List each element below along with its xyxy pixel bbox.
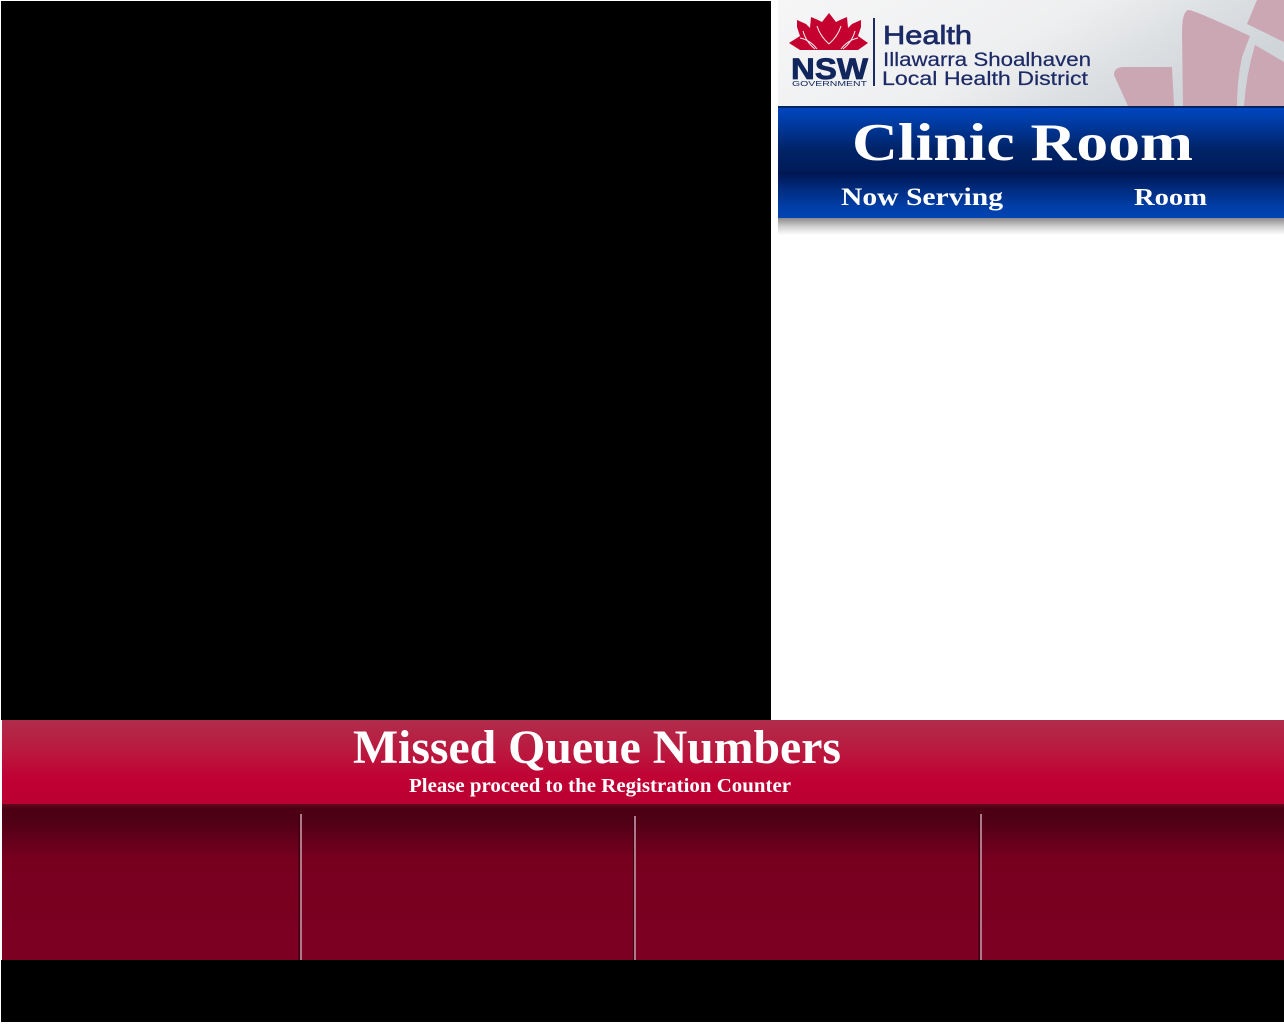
logo wordmark: Government: GOVERNMENT <box>792 79 868 88</box>
logo divider <box>873 18 875 86</box>
missed queue banner <box>2 720 1284 804</box>
health heading: Health <box>883 20 972 50</box>
subheading: registration instruction: Please proceed to the Registration Counter <box>409 775 791 797</box>
column heading: Now Serving: Now Serving <box>841 184 1004 211</box>
footer band <box>1 960 1284 1022</box>
video panel <box>1 1 771 720</box>
column heading: Room: Room <box>1134 185 1207 211</box>
clinic room title bar <box>778 106 1284 172</box>
logo header panel <box>778 0 1284 106</box>
district name line 1: Illawarra Shoalhaven <box>883 50 1091 71</box>
icon: NSW waratah logo <box>789 13 868 50</box>
heading: Missed Queue Numbers: Missed Queue Numbers <box>353 721 841 774</box>
decorative waratah petals <box>1114 0 1284 106</box>
title: Clinic Room: Clinic Room <box>852 114 1193 172</box>
district name line 2: Local Health District <box>882 69 1089 90</box>
missed numbers panel <box>2 804 1284 960</box>
table header bar <box>778 172 1284 218</box>
logo wordmark: NSW: NSW <box>791 53 869 86</box>
